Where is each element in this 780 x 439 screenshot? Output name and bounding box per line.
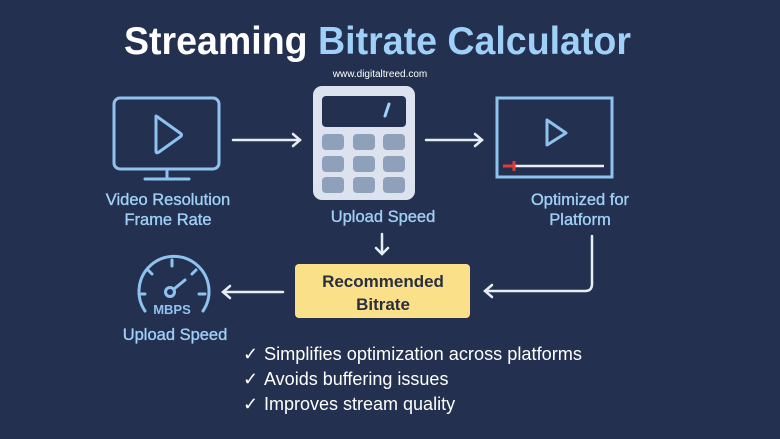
box: recommended bitrate: Bitrate [356,295,410,314]
benefits list: ✓ [243,344,258,364]
benefits list: Avoids buffering issues [264,369,448,389]
label: gauge upload speed: Upload Speed [123,326,227,344]
arrow: down to bitrate [376,234,388,254]
benefits list [243,344,582,414]
title: Streaming Bitrate Calculator [124,20,631,63]
label: optimized for platform: Platform [549,211,611,229]
label: optimized for platform [531,191,630,229]
benefits list: ✓ [243,369,258,389]
label: upload speed: Upload Speed [331,208,435,226]
benefits list: Simplifies optimization across platforms [264,344,582,364]
icon: monitor [114,98,219,179]
arrow: monitor to calculator [233,134,300,146]
label: video resolution [106,191,230,229]
icon: calculator [313,86,415,200]
icon: video player [497,98,612,177]
box: recommended bitrate: Recommended [322,272,444,291]
icon: speed gauge: MBPS [153,302,191,317]
benefits list: Improves stream quality [264,394,455,414]
label: video resolution: Frame Rate [124,211,212,229]
arrow: calculator to player [426,134,482,146]
icon: speed gauge [139,256,209,317]
label: optimized for platform: Optimized for [531,191,630,209]
url text: www.digitaltreed.com [332,69,427,80]
box: recommended bitrate [295,264,470,318]
label: video resolution: Video Resolution [106,191,230,209]
arrow: platform to bitrate [485,236,592,297]
benefits list: ✓ [243,394,258,414]
arrow: bitrate to gauge [223,286,283,298]
